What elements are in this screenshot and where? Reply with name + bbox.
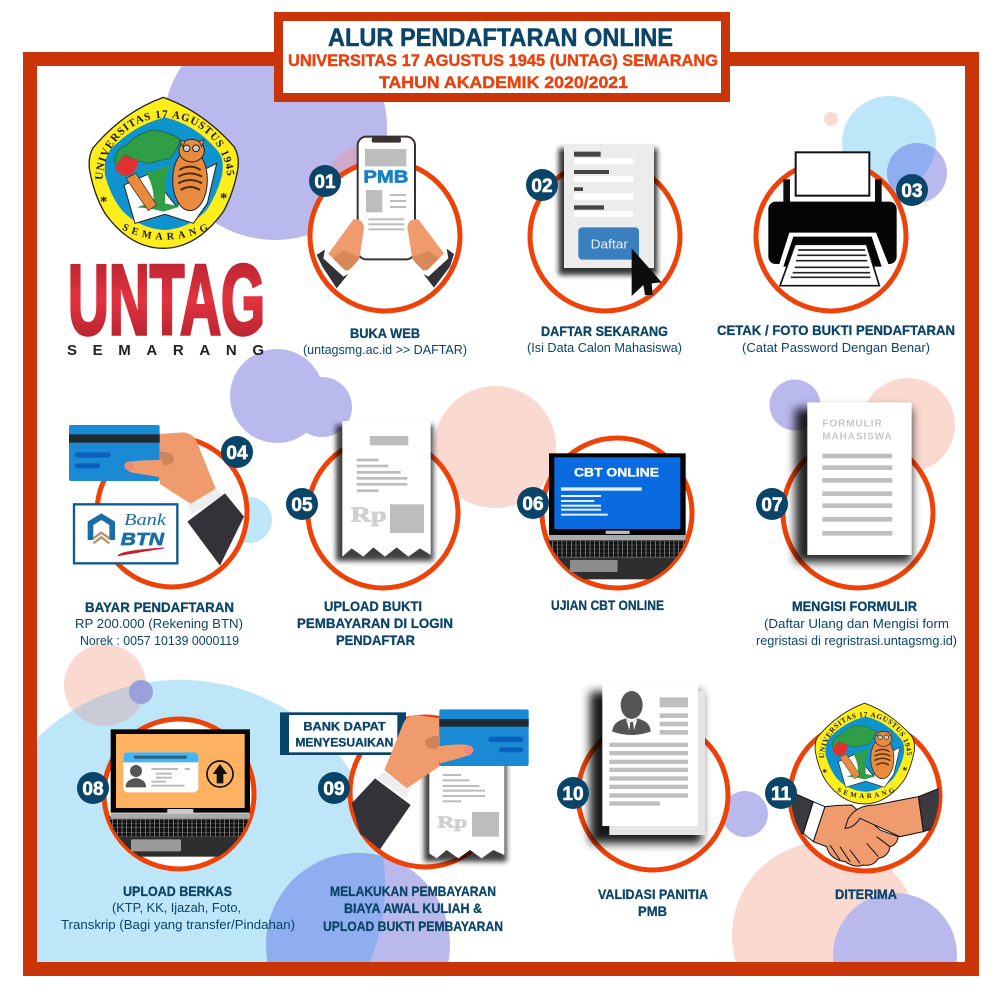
ring	[310, 161, 460, 311]
logo: university crest	[88, 96, 239, 249]
step 03	[717, 152, 955, 355]
caption: PEMBAYARAN DI LOGIN	[297, 615, 453, 631]
caption: (untagsmg.ac.id >> DAFTAR)	[303, 342, 467, 357]
logo: university crest: UNIVERSITAS 17 AGUSTUS 1945	[95, 110, 234, 180]
number badge: 06	[522, 494, 544, 515]
logo: crest: *	[902, 765, 907, 776]
step 09	[280, 709, 529, 934]
ring	[104, 719, 254, 869]
logo: UNTAG wordmark	[67, 244, 265, 359]
logo: university crest: *	[220, 191, 227, 207]
icon: receipt	[336, 421, 433, 561]
label: bank dapat menyesuaikan: BANK DAPAT	[303, 720, 386, 734]
step 08	[61, 719, 295, 932]
icon: hand with card and Bank BTN logo: Bank	[124, 510, 166, 529]
logo: crest	[814, 702, 915, 804]
number badge	[517, 487, 549, 519]
caption: BAYAR PENDAFTARAN	[85, 599, 234, 615]
number badge	[756, 488, 788, 520]
title: ALUR PENDAFTARAN ONLINE	[328, 24, 673, 52]
title box	[278, 16, 726, 98]
subtitle academic year: TAHUN AKADEMIK 2020/2021	[379, 73, 628, 92]
number badge	[557, 777, 589, 809]
number badge: 07	[761, 495, 783, 516]
caption: PMB	[638, 903, 667, 919]
caption	[527, 323, 682, 355]
caption	[323, 883, 503, 934]
icon: laptop CBT online: CBT ONLINE	[574, 466, 659, 480]
number badge	[526, 169, 558, 201]
logo: crest: SEMARANG	[837, 788, 894, 798]
number badge	[765, 777, 797, 809]
step 01	[303, 137, 467, 357]
number badge	[286, 488, 318, 520]
number badge	[318, 772, 350, 804]
caption: Norek : 0057 10139 0000119	[80, 633, 239, 648]
caption	[303, 325, 467, 357]
caption: UPLOAD BERKAS	[123, 883, 232, 899]
number badge: 03	[901, 181, 923, 202]
icon: hand with card and Bank BTN logo: BTN	[121, 529, 165, 549]
caption: UPLOAD BUKTI	[324, 598, 422, 614]
caption: DITERIMA	[835, 886, 897, 902]
number badge: 01	[314, 172, 336, 193]
wordmark caption: SEMARANG	[67, 342, 264, 359]
icon: printer	[768, 152, 897, 286]
number badge: 08	[82, 779, 104, 800]
label: bank dapat menyesuaikan	[280, 712, 406, 755]
caption: Transkrip (Bagi yang transfer/Pindahan)	[61, 917, 295, 932]
ring	[97, 437, 247, 587]
logo: UNTAG wordmark: UNTAG	[68, 244, 265, 355]
caption: UPLOAD BUKTI PEMBAYARAN	[323, 918, 503, 934]
caption	[756, 598, 957, 648]
icon: CV documents	[590, 683, 705, 843]
ring	[756, 161, 906, 311]
ring	[542, 438, 692, 588]
caption: (Daftar Ulang dan Mengisi form	[764, 616, 949, 631]
number badge	[77, 772, 109, 804]
caption: BIAYA AWAL KULIAH &	[344, 900, 482, 916]
caption: RP 200.000 (Rekening BTN)	[75, 616, 243, 631]
ring	[790, 721, 940, 871]
caption: VALIDASI PANITIA	[598, 886, 708, 902]
number badge: 10	[562, 784, 584, 805]
logo: university crest: *	[100, 194, 107, 210]
icon: registration form	[559, 144, 662, 296]
step 06	[517, 438, 692, 613]
caption	[598, 886, 708, 919]
icon: receipt: Rp	[351, 505, 387, 527]
caption: (Catat Password Dengan Benar)	[742, 340, 930, 355]
number badge	[309, 165, 341, 197]
ring	[578, 720, 728, 870]
caption	[75, 599, 243, 648]
caption: regristasi di regristrasi.untagsmg.id)	[756, 633, 957, 648]
caption: BUKA WEB	[350, 325, 420, 341]
ring	[783, 438, 933, 588]
icon: hand with card and receipt: Rp	[437, 812, 467, 831]
caption: MELAKUKAN PEMBAYARAN	[330, 883, 496, 899]
caption: MENGISI FORMULIR	[792, 598, 917, 614]
icon: phone with hands: PMB	[363, 167, 408, 187]
subtitle university: UNIVERSITAS 17 AGUSTUS 1945 (UNTAG) SEMARANG	[288, 51, 718, 70]
icon: registration form: Daftar	[591, 238, 628, 252]
step 10	[557, 683, 728, 919]
icon: hand with card and Bank BTN logo	[69, 425, 244, 566]
caption: UJIAN CBT ONLINE	[551, 597, 664, 613]
label: bank dapat menyesuaikan: MENYESUAIKAN	[295, 736, 393, 750]
icon: form document	[795, 402, 912, 562]
caption	[717, 322, 955, 355]
number badge: 11	[771, 784, 791, 805]
logo: crest: *	[822, 768, 827, 779]
icon: laptop with ID card upload	[107, 729, 253, 857]
step 11	[765, 702, 942, 902]
caption: PENDAFTAR	[336, 632, 415, 648]
ring	[308, 438, 458, 588]
caption	[61, 883, 295, 932]
icon: phone with hands	[317, 137, 454, 288]
number badge: 09	[323, 779, 345, 800]
step 07	[756, 402, 957, 648]
step 02	[526, 144, 682, 355]
logo: university crest: SEMARANG	[122, 224, 208, 240]
icon: laptop CBT online	[545, 453, 688, 579]
number badge	[896, 174, 928, 206]
caption	[297, 598, 453, 648]
number badge	[221, 436, 253, 468]
ring	[350, 717, 500, 867]
caption: (Isi Data Calon Mahasiswa)	[527, 340, 682, 355]
icon: form document: MAHASISWA	[822, 431, 892, 442]
caption: CETAK / FOTO BUKTI PENDAFTARAN	[717, 322, 955, 338]
icon: form document: FORMULIR	[822, 419, 882, 430]
number badge: 02	[531, 176, 553, 197]
icon: hand with card and receipt	[280, 709, 529, 862]
caption: DAFTAR SEKARANG	[541, 323, 668, 339]
number badge: 04	[226, 443, 248, 464]
icon: handshake	[783, 787, 943, 866]
step 05	[286, 421, 458, 648]
step 04	[69, 425, 253, 648]
caption: (KTP, KK, Ijazah, Foto,	[112, 900, 241, 915]
ring	[530, 161, 680, 311]
number badge: 05	[291, 495, 313, 516]
logo: crest: UNIVERSITAS 17 AGUSTUS 1945	[819, 712, 912, 758]
